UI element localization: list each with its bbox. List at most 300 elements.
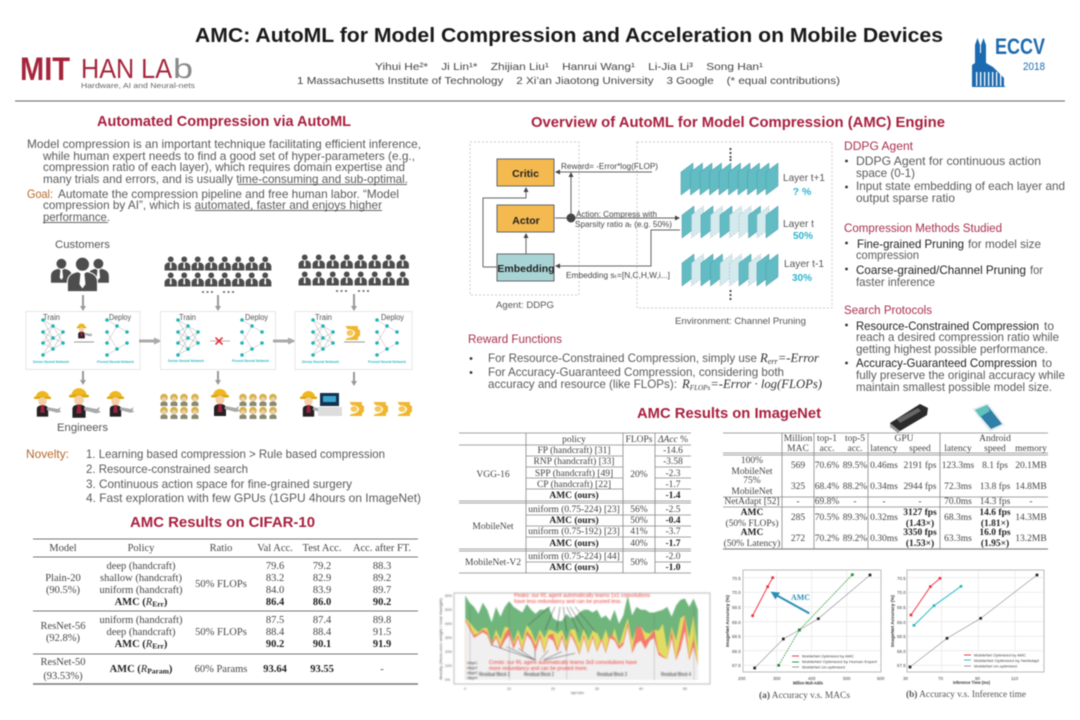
label: reward: Reward= -Error*log(FLOP) <box>561 161 658 171</box>
table: latency and speed: MAC <box>787 444 809 454</box>
axis tick labels: 20 <box>551 687 555 691</box>
goal paragraph: Goal: <box>27 187 53 201</box>
table: latency and speed: 569 <box>791 461 805 471</box>
icon: phone <box>972 403 1005 432</box>
callout: crests: more redundancy and can be pruned more. <box>489 666 588 672</box>
table: CIFAR-10 results: Acc. after FT. <box>353 543 411 554</box>
axis labels: 300 <box>773 676 781 681</box>
section: reward functions: Reward Functions <box>468 334 562 346</box>
table: CIFAR-10 results: 50% FLOPs <box>195 579 247 590</box>
axis tick labels: 50 <box>683 687 687 691</box>
table: CIFAR-10 results: ResNet-50 <box>41 657 85 668</box>
arrows: control flow <box>483 170 680 268</box>
table: CIFAR-10 results: 50% FLOPs <box>195 627 247 638</box>
axis labels: 110 <box>1011 676 1019 681</box>
arrow: AMC improvement <box>771 592 809 613</box>
icon: GPU card <box>890 404 928 433</box>
table: latency and speed: - <box>918 497 922 507</box>
table: latency and speed: 72.3ms <box>944 482 972 492</box>
table: latency and speed: NetAdapt [52] <box>724 497 780 507</box>
table: pruning policies: -2.0 <box>665 552 681 562</box>
table: CIFAR-10 results: 91.5 <box>373 627 391 638</box>
axis labels: ImageNet Accuracy (%) <box>890 594 895 647</box>
section: search protocols: fully preserve the original accuracy while <box>856 368 1065 382</box>
panel: pipeline three, AutoML: Dense Neural Network <box>302 360 339 364</box>
arrow: pipeline two to three <box>273 338 296 344</box>
intro paragraph <box>27 137 421 186</box>
residual block labels: Residual Block 1 <box>479 672 510 678</box>
table: CIFAR-10 results: ResNet-56 <box>41 621 85 632</box>
table: latency and speed: 20.1MB <box>1015 461 1047 471</box>
series: NetAdapt <box>913 585 962 627</box>
label: layer t: Layer t <box>783 218 814 230</box>
axis labels: 70.5 <box>897 576 906 581</box>
table: CIFAR-10 results <box>33 539 418 684</box>
icon: customers small group <box>51 257 109 292</box>
table: CIFAR-10 results: (92.8%) <box>46 633 81 644</box>
caption a: (a) Accuracy v.s. MACs <box>759 690 850 701</box>
section: compression methods studied: compression <box>856 248 919 262</box>
axis labels: 70.5 <box>732 576 741 581</box>
series: AMC <box>751 576 774 617</box>
panel: pipeline two, blocked: Pruned Neural Network <box>232 359 269 363</box>
goal paragraph <box>27 187 399 224</box>
icon: three engineers <box>34 388 135 418</box>
residual block labels: Residual Block 4 <box>661 672 691 678</box>
table: CIFAR-10 results: ) <box>169 664 173 675</box>
axis labels: 69.0 <box>732 620 741 625</box>
table: latency and speed: 13.8 fps <box>980 481 1011 492</box>
axis labels: Inference Time (ms) <box>953 680 990 685</box>
table: CIFAR-10 results: 86.0 <box>313 597 331 608</box>
axis labels: 200 <box>738 676 746 681</box>
table: CIFAR-10 results: AMC (R <box>115 639 152 650</box>
icon: layer t channels <box>682 206 778 238</box>
table: CIFAR-10 results: Val Acc. <box>257 543 293 554</box>
arrows: pipeline to engineers <box>80 371 357 386</box>
table: pruning policies: RNP (handcraft) [33] <box>534 456 614 467</box>
axis labels: 68.5 <box>732 634 741 639</box>
panel: pipeline one, human engineer: Train <box>43 313 60 322</box>
axis tick labels: density (#non-zero weight / total #weight) <box>439 598 443 680</box>
section: search protocols: to <box>1042 356 1052 370</box>
table: CIFAR-10 results: 87.4 <box>313 615 332 626</box>
novelty list: 2. Resource-constrained search <box>86 462 248 476</box>
intro paragraph: Model compression is an important technique facilitating efficient inference, <box>27 137 421 151</box>
table: CIFAR-10 results: deep (handcraft) <box>106 627 176 638</box>
logo: MIT Han Lab: HAN LA <box>81 53 172 84</box>
intro paragraph: while human expert needs to find a good set of hyper-parameters (e.g., <box>42 149 415 163</box>
section: compression methods studied <box>844 223 1043 289</box>
table: CIFAR-10 results: Policy <box>128 543 155 554</box>
label: layer t: 50% <box>793 230 814 242</box>
section: reward functions: accuracy and resource (like FLOPs): <box>488 377 677 391</box>
intro paragraph: compression ratio of each layer), which requires domain expertise and <box>43 160 405 174</box>
section: search protocols: Search Protocols <box>844 305 932 317</box>
label: layer t-1 <box>784 258 824 284</box>
table: latency and speed: 13.2MB <box>1015 534 1047 544</box>
table: latency and speed: - <box>1029 497 1033 507</box>
legend <box>467 661 478 680</box>
table: CIFAR-10 results: 91.9 <box>373 639 391 650</box>
section: DDPG agent: output sparse ratio <box>856 191 955 205</box>
axis labels: 30 <box>903 676 909 681</box>
axis labels: 67.5 <box>897 663 906 668</box>
table: latency and speed: speed <box>909 444 931 454</box>
table: latency and speed: - <box>882 497 886 507</box>
table: CIFAR-10 results: ) <box>164 597 168 608</box>
icon: layer t-1 channels <box>682 254 778 286</box>
table: latency and speed: 100% <box>741 456 763 466</box>
panel: pipeline one, human engineer <box>26 312 140 370</box>
table: latency and speed: - <box>796 497 800 507</box>
table: latency and speed: AMC <box>741 508 763 518</box>
section: compression methods studied: for model size <box>968 237 1041 251</box>
panel: pipeline two, blocked <box>160 312 276 370</box>
table: pruning policies: AMC (ours) <box>549 515 599 526</box>
table: CIFAR-10 results: (93.53%) <box>43 671 83 682</box>
axis labels: 90 <box>975 676 981 681</box>
table: latency and speed: (1.53×) <box>906 538 934 549</box>
callout: peaks <box>514 593 650 605</box>
axis labels: 70.0 <box>897 590 906 595</box>
table: latency and speed: acc. <box>847 444 863 454</box>
table: CIFAR-10 results: Test Acc. <box>303 543 341 554</box>
authors: Yihui He²* Ji Lin¹* Zhijian Liu¹ Hanrui Wang¹ Li-Jia Li³ Song Han¹ <box>375 61 764 73</box>
novelty list: 4. Fast exploration with few GPUs (1GPU 4hours on ImageNet) <box>86 491 421 505</box>
table: CIFAR-10 results: 60% Params <box>195 664 247 675</box>
axis tick labels: layer index <box>571 690 584 695</box>
table: latency and speed: 0.30ms <box>870 534 898 544</box>
axis labels: 400 <box>808 676 816 681</box>
table: CIFAR-10 results: AMC (R <box>115 597 152 608</box>
logo: MIT Han Lab: Hardware, AI and Neural-nets <box>81 83 196 90</box>
panel: pipeline three, AutoML: Deploy <box>381 313 404 322</box>
table: pruning policies: uniform (0.75-224) [44] <box>528 551 620 562</box>
table: latency and speed: 75% <box>743 476 761 486</box>
affiliations: 1 Massachusetts Institute of Technology 2 Xi’an Jiaotong University 3 Google (* equal contributions) <box>297 75 840 87</box>
table: CIFAR-10 results: Err <box>152 642 165 650</box>
table: CIFAR-10 results: 88.3 <box>373 561 391 572</box>
table: latency and speed: (1.95×) <box>981 538 1009 549</box>
section: search protocols <box>844 305 1065 394</box>
legend: stage1 <box>467 661 478 665</box>
axis labels: 500 <box>843 676 851 681</box>
panel: ImageNet results <box>439 403 1048 701</box>
axis labels: 70.0 <box>732 590 741 595</box>
axis labels: 67.5 <box>732 663 741 668</box>
table: pruning policies: SPP (handcraft) [49] <box>535 468 613 479</box>
chart: density per layer <box>439 593 710 695</box>
label: AMC: AMC <box>791 593 810 602</box>
block: critic: Critic <box>512 168 539 180</box>
table: latency and speed: top-1 <box>817 434 837 444</box>
logo: ECCV 2018: 2018 <box>1023 61 1045 73</box>
axis labels: 600 <box>877 676 885 681</box>
panel: overview of AMC engine <box>468 114 1065 394</box>
label: layer t+1: Layer t+1 <box>783 172 825 184</box>
caption b: (b) Accuracy v.s. Inference time <box>906 689 1026 700</box>
label: embedding state: Embedding sₜ=[N,C,H,W,i...] <box>566 270 670 280</box>
table: latency and speed: (1.81×) <box>981 518 1009 529</box>
section: reward functions: For Resource-Constrained Compression, simply use <box>488 351 757 365</box>
table: pruning policies: MobileNet-V2 <box>465 558 521 568</box>
table: latency and speed: memory <box>1015 444 1047 454</box>
table: latency and speed: 0.46ms <box>870 461 898 471</box>
residual block labels: Residual Block 3 <box>597 672 627 678</box>
section: search protocols: maintain smallest possible model size. <box>856 380 1052 394</box>
table: pruning policies: -3.58 <box>663 457 683 467</box>
axis labels <box>890 576 1019 685</box>
table: CIFAR-10 results: Param <box>147 666 170 676</box>
legend: MobileNet Optimized by AMC <box>974 652 1026 658</box>
table: pruning policies: policy <box>562 435 586 445</box>
table: latency and speed: 89.3% <box>843 513 867 523</box>
table: pruning policies: VGG-16 <box>476 470 510 480</box>
table: latency and speed: (50% FLOPs) <box>725 518 779 529</box>
table: latency and speed: latency <box>870 444 898 454</box>
axis tick labels: 60% <box>445 594 452 598</box>
label: customers: Customers <box>55 239 111 251</box>
table: pruning policies: -14.6 <box>663 446 683 456</box>
icon: crowd of customers, right <box>299 254 409 291</box>
table: latency and speed: 16.0 fps <box>979 528 1011 538</box>
logo: MIT Han Lab: b <box>173 53 193 84</box>
section: DDPG agent: Input state embedding of each layer and <box>856 179 1065 193</box>
heading: Overview of AutoML for Model Compression (AMC) Engine <box>531 114 945 131</box>
diagram: AMC engine <box>470 142 832 327</box>
legend: MobileNet Optimized by Human Expert <box>802 659 878 664</box>
table: CIFAR-10 results: 79.6 <box>266 561 284 572</box>
section: reward functions: For Accuracy-Guaranteed Compression, considering both <box>488 365 784 379</box>
table: latency and speed: 14.3MB <box>1015 513 1047 523</box>
axis tick labels: 10% <box>445 664 452 668</box>
table: CIFAR-10 results: 90.2 <box>373 597 391 608</box>
label: layer t-1: 30% <box>792 272 813 284</box>
section: reward functions: R <box>760 351 768 365</box>
legend: MobileNet Un-optimized <box>802 664 845 670</box>
label: layer t+1: ? % <box>793 186 812 198</box>
header band <box>20 25 1045 90</box>
table: pruning policies: 20% <box>630 470 648 480</box>
table: latency and speed: 70.2% <box>815 534 839 544</box>
table: pruning policies: AMC (ours) <box>549 562 599 573</box>
panel: pipeline three, AutoML <box>295 312 412 370</box>
table: latency and speed: - <box>853 497 857 507</box>
axis tick labels: 40% <box>445 622 452 626</box>
icon: many engineers <box>160 389 277 419</box>
panel: pipeline one, human engineer: Deploy <box>109 313 131 322</box>
axis labels <box>725 576 885 686</box>
axis labels: 68.5 <box>897 634 906 639</box>
table: pruning policies: MobileNet <box>472 522 514 532</box>
section: DDPG agent: DDPG Agent for continuous action <box>856 154 1041 168</box>
series: AMC <box>910 577 941 616</box>
axis tick labels: 40 <box>639 687 643 691</box>
axis tick labels: 20% <box>445 650 452 654</box>
heading: AMC Results on CIFAR-10 <box>130 514 315 531</box>
table: latency and speed: 8.1 fps <box>982 460 1008 471</box>
table: pruning policies: uniform (0.75-224) [23] <box>528 504 620 515</box>
callout: peaks: Peaks: our RL agent automatically learns 1x1 convolutions <box>514 593 650 599</box>
table: pruning policies: -1.7 <box>665 539 681 549</box>
table: latency and speed: 3127 fps <box>903 508 937 518</box>
axis tick labels: 10 <box>507 687 511 691</box>
section: reward functions: =-Error · log(FLOPs) <box>710 377 822 391</box>
novelty list <box>26 447 421 505</box>
table: latency and speed: 123.3ms <box>942 461 975 471</box>
panel: pipeline two, blocked: Dense Neural Network <box>168 359 204 363</box>
label: environment: Environment: Channel Pruning <box>675 316 806 327</box>
legend: MobileNet Optimized by AMC <box>802 654 854 658</box>
panel: pipeline three, AutoML: Pruned Neural Network <box>368 360 406 364</box>
logo: ECCV 2018 <box>972 34 1045 87</box>
label: engineers: Engineers <box>57 422 108 434</box>
table: CIFAR-10 results: 89.8 <box>373 615 391 626</box>
label: action: Sparsity ratio aₜ (e.g. 50%) <box>575 219 672 229</box>
series: human expert <box>777 573 854 667</box>
section: DDPG agent: space (0-1) <box>856 166 915 180</box>
table: latency and speed: 14.8MB <box>1015 482 1047 492</box>
table: pruning policies: 40% <box>630 539 648 549</box>
table: pruning policies: uniform (0.75-192) [23] <box>528 526 620 537</box>
table: pruning policies: -0.4 <box>665 516 681 526</box>
table: latency and speed: 3350 fps <box>903 528 937 538</box>
table: latency and speed: 63.3ms <box>944 534 972 544</box>
table: latency and speed: top-5 <box>845 434 865 444</box>
label: layer t-1: Layer t-1 <box>784 258 824 270</box>
table: CIFAR-10 results: 93.64 <box>263 664 288 675</box>
table: CIFAR-10 results: ) <box>164 639 168 650</box>
block: actor: Actor <box>512 215 540 227</box>
table: pruning policies: -1.0 <box>665 563 681 573</box>
novelty list: 1. Learning based compression > Rule based compression <box>86 447 385 461</box>
residual block labels: Residual Block 2 <box>524 672 554 678</box>
section: reward functions <box>468 334 822 392</box>
table: CIFAR-10 results: 82.9 <box>313 573 331 584</box>
section: compression methods studied: Coarse-grained/Channel Pruning <box>856 263 1026 277</box>
table: CIFAR-10 results: - <box>380 664 384 675</box>
section: search protocols: Resource-Constrained Compression <box>856 319 1039 333</box>
section: compression methods studied: Compression Methods Studied <box>844 223 1002 235</box>
table: CIFAR-10 results: 79.2 <box>313 561 331 572</box>
table: latency and speed <box>723 433 1048 549</box>
table: CIFAR-10 results: 88.4 <box>266 627 285 638</box>
table: pruning policies: CP (handcraft) [22] <box>537 479 611 490</box>
icon: layer t+1 channels <box>681 163 778 195</box>
table: latency and speed: 0.32ms <box>870 513 898 523</box>
table: latency and speed: 2944 fps <box>904 481 937 492</box>
table: latency and speed: 89.5% <box>843 461 867 471</box>
table: latency and speed: 70.0ms <box>944 497 972 507</box>
callout: crests <box>489 660 637 672</box>
table: CIFAR-10 results: deep (handcraft) <box>106 561 176 572</box>
table: latency and speed: 0.34ms <box>870 482 898 492</box>
intro paragraph: many trials and errors, and is usually time-consuming and sub-optimal. <box>43 172 408 186</box>
table: CIFAR-10 results: uniform (handcraft) <box>99 585 183 596</box>
panel: pipeline one, human engineer: Pruned Neural Network <box>97 360 134 364</box>
legend: MobileNet Optimized by NetAdapt <box>974 658 1040 663</box>
table: pruning policies: 50% <box>630 516 648 526</box>
table: pruning policies: ΔAcc % <box>657 435 688 445</box>
block: critic <box>497 159 554 186</box>
label: action: Action: Compress with <box>576 209 657 219</box>
agent dashed box <box>470 142 579 295</box>
table: latency and speed: latency <box>944 444 972 454</box>
table: latency and speed: (50% Latency) <box>724 538 780 549</box>
legend: stage4 <box>467 676 478 680</box>
axis labels: 70 <box>938 676 944 681</box>
table: pruning policies: -1.4 <box>665 491 681 501</box>
table: latency and speed: 70.5% <box>815 513 839 523</box>
table: CIFAR-10 results: Ratio <box>210 543 232 554</box>
axis labels: 69.5 <box>897 605 906 610</box>
novelty list: 3. Continuous action space for fine-grained surgery <box>86 477 352 491</box>
table: pruning policies: -3.7 <box>665 527 681 537</box>
table: pruning policies: FP (handcraft) [31] <box>538 445 610 456</box>
table: latency and speed: 89.2% <box>843 534 867 544</box>
legend <box>790 651 879 670</box>
table: latency and speed: 2191 fps <box>904 460 937 471</box>
title: AMC: AutoML for Model Compression and Acceleration on Mobile Devices <box>195 25 943 47</box>
label: layer t+1 <box>783 172 825 198</box>
section: search protocols: to <box>1044 319 1054 333</box>
table: pruning policies <box>459 433 691 573</box>
axis labels: 69.0 <box>897 620 906 625</box>
table: pruning policies: -2.3 <box>665 469 681 479</box>
table: CIFAR-10 results: Plain-20 <box>45 573 81 584</box>
legend: stage3 <box>467 671 478 675</box>
table: pruning policies: 56% <box>630 505 648 515</box>
table: pruning policies: 50% <box>630 558 648 568</box>
table: CIFAR-10 results: 84.0 <box>266 585 284 596</box>
table: latency and speed: AMC <box>741 528 763 538</box>
axis tick labels: 0 <box>464 687 466 691</box>
axis tick labels: 50% <box>445 608 452 612</box>
heading: AMC Results on ImageNet <box>637 405 821 422</box>
series: un-optimized <box>909 574 1038 668</box>
panel: pipeline three, AutoML: Train <box>315 313 332 322</box>
table: CIFAR-10 results: 86.4 <box>266 597 285 608</box>
logo: MIT Han Lab <box>20 51 196 90</box>
panel: CIFAR-10 results <box>33 514 418 684</box>
environment dashed box <box>637 142 832 308</box>
section: compression methods studied: Fine-grained Pruning <box>857 237 964 251</box>
logo: ECCV 2018: ECCV <box>995 34 1045 59</box>
section: reward functions: =-Error <box>778 351 819 365</box>
label: action <box>575 209 672 229</box>
axis labels: Million Mult-Adds <box>793 680 823 686</box>
table: pruning policies: FLOPs <box>626 435 653 445</box>
chart: accuracy vs inference time <box>890 570 1044 700</box>
legend: MobileNet Un-optimized <box>974 664 1017 668</box>
table: CIFAR-10 results: 87.5 <box>266 615 284 626</box>
goal paragraph: Automate the compression pipeline and free human labor. “Model <box>58 187 399 201</box>
axis tick labels: 30% <box>445 636 452 640</box>
axis tick labels: 0% <box>445 678 450 682</box>
table: CIFAR-10 results: AMC (R <box>110 664 147 675</box>
panel: pipeline two, blocked: Train <box>179 313 196 322</box>
table: pruning policies: -2.5 <box>665 505 681 515</box>
section: reward functions: err <box>768 357 779 366</box>
panel: pipeline one, human engineer: Dense Neural Network <box>33 360 69 364</box>
label: agent: Agent: DDPG <box>496 300 554 311</box>
table: CIFAR-10 results: shallow (handcraft) <box>100 573 182 584</box>
table: pruning policies: AMC (ours) <box>549 538 599 549</box>
icon: crowd of customers, middle <box>165 256 271 292</box>
table: CIFAR-10 results: 88.4 <box>313 627 332 638</box>
table: latency and speed: speed <box>984 444 1006 454</box>
